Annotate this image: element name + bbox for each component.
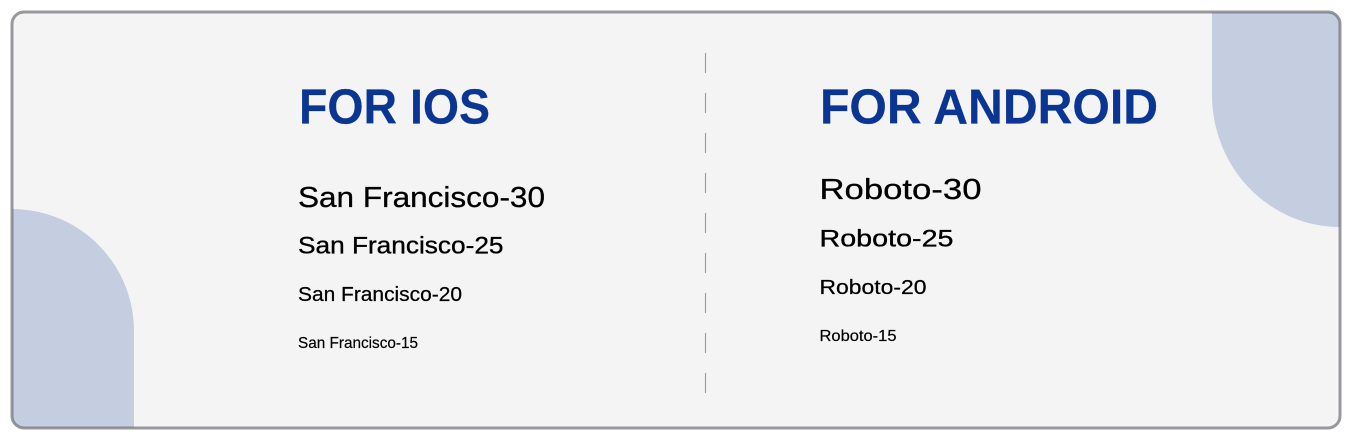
text sample: San Francisco 25: San Francisco-25 xyxy=(298,232,504,260)
text sample: Roboto 15: Roboto-15 xyxy=(820,328,897,345)
text sample: Roboto 25: Roboto-25 xyxy=(820,226,954,252)
column: for iOS xyxy=(298,80,545,352)
decorative shape: bottom-left corner xyxy=(12,209,134,428)
decorative shape: top-right corner xyxy=(1212,12,1340,227)
column: for Android xyxy=(820,80,1158,345)
text sample: San Francisco 30: San Francisco-30 xyxy=(298,182,545,214)
text sample: San Francisco 20: San Francisco-20 xyxy=(298,284,462,306)
center dashed divider xyxy=(704,53,706,394)
text sample: Roboto 30: Roboto-30 xyxy=(820,174,982,206)
heading: for Android: FOR ANDROID xyxy=(820,80,1158,134)
heading: for iOS: FOR IOS xyxy=(299,80,490,134)
text sample: San Francisco 15: San Francisco-15 xyxy=(298,335,418,352)
text sample: Roboto 20: Roboto-20 xyxy=(820,277,926,299)
